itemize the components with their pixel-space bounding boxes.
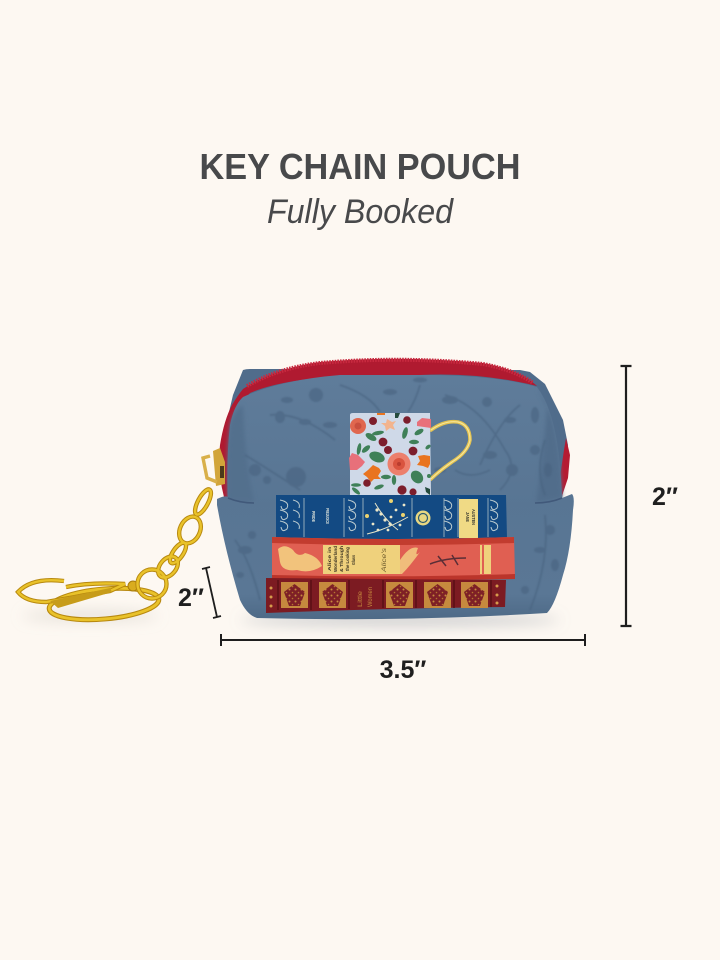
label: depth 2 in: 2″ xyxy=(178,584,204,612)
subtitle: Fully Booked xyxy=(267,193,454,231)
book: Alice in Wonderland: Glass xyxy=(351,555,356,565)
book title: PRIDE xyxy=(311,511,316,522)
book: Pride and Prejudice: JANE xyxy=(465,512,470,522)
mug florals xyxy=(349,413,431,496)
dimension: height xyxy=(620,366,632,626)
ground shadow xyxy=(22,611,560,626)
label: height 2 in: 2″ xyxy=(652,483,678,511)
pouch front panel xyxy=(227,375,562,508)
zipper pull xyxy=(213,448,225,486)
tonal floral pattern xyxy=(235,378,559,610)
book: Alice in Wonderland: Alice in xyxy=(327,547,332,571)
book: Pride and Prejudice xyxy=(276,495,507,540)
key ring xyxy=(48,584,160,624)
spine text: Little xyxy=(357,591,364,607)
product: key chain pouch xyxy=(18,359,574,626)
title: KEY CHAIN POUCH xyxy=(200,146,520,187)
book title xyxy=(311,508,330,524)
branch ornament xyxy=(430,555,466,566)
hook xyxy=(203,456,217,482)
book: Alice in Wonderland: Wonderland xyxy=(333,546,338,572)
book: Alice in Wonderland: Alice's xyxy=(382,548,388,573)
pouch back panel xyxy=(229,369,568,500)
pouch lower pocket xyxy=(217,494,574,619)
book: Pride and Prejudice: AUSTEN xyxy=(471,509,476,525)
mug body xyxy=(350,413,431,496)
book: Little Women xyxy=(266,578,506,613)
label: width 3.5 in: 3.5″ xyxy=(380,656,426,684)
mug xyxy=(349,413,470,496)
mug handle xyxy=(431,422,470,479)
book: Alice in Wonderland: & Through xyxy=(339,546,344,572)
fern ornament xyxy=(365,499,408,534)
book: Little Women: Women xyxy=(367,587,374,607)
gold illustration xyxy=(278,546,322,571)
dimension: depth xyxy=(202,567,221,618)
chain links xyxy=(138,487,214,598)
key chain xyxy=(18,448,225,624)
book: Alice in Wonderland: the Looking xyxy=(345,547,350,571)
book title: PREJUDICE xyxy=(325,508,330,524)
dimension: width xyxy=(221,634,585,646)
lobster clasp xyxy=(18,580,125,602)
medallion xyxy=(416,510,430,526)
zipper xyxy=(219,359,570,499)
author label xyxy=(459,499,478,538)
book label xyxy=(323,545,400,574)
book: Alice in Wonderland xyxy=(272,537,515,581)
